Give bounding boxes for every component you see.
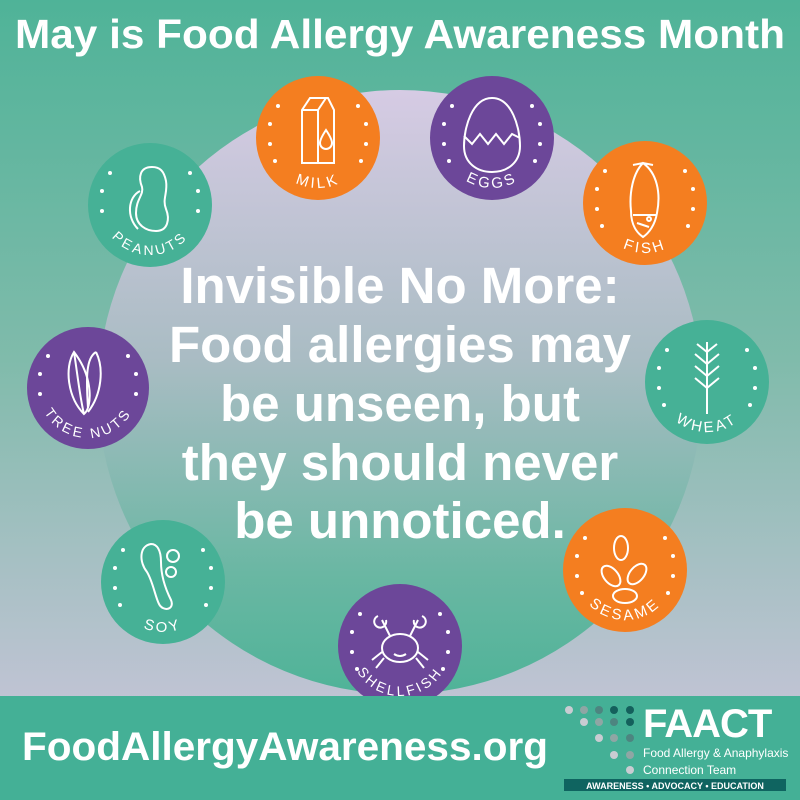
badge: sesame	[563, 508, 687, 632]
big background circle	[98, 90, 702, 694]
badge: wheat	[645, 320, 769, 444]
main message: be unnoticed.	[234, 492, 566, 549]
badge: shellfish	[338, 584, 462, 696]
badge: milk: MILK	[296, 174, 338, 188]
badge: wheat: WHEAT	[678, 412, 733, 432]
main message	[169, 257, 632, 549]
bottom band	[0, 696, 800, 800]
badge: fish: FISH	[624, 238, 664, 254]
badge: soy: SOY	[144, 619, 177, 632]
main message: be unseen, but	[220, 375, 580, 432]
badge: peanuts: PEANUTS	[112, 231, 185, 255]
badge: milk	[256, 76, 380, 200]
main message: Food allergies may	[169, 316, 632, 373]
badge: peanuts	[88, 143, 212, 267]
badge: shellfish: SHELLFISH	[358, 668, 441, 696]
FAACT logo: Connection Team	[643, 763, 736, 777]
title: May is Food Allergy Awareness Month	[15, 11, 785, 57]
badge: eggs: EGGS	[466, 172, 514, 188]
FAACT logo	[564, 702, 788, 791]
website url: FoodAllergyAwareness.org	[22, 725, 548, 769]
main message: they should never	[182, 434, 618, 491]
badge: tree nuts: TREE NUTS	[46, 407, 129, 438]
badge: eggs	[430, 76, 554, 200]
FAACT logo: Food Allergy & Anaphylaxis	[643, 746, 788, 760]
badge: sesame: SESAME	[590, 598, 658, 620]
badge: tree nuts	[27, 327, 149, 449]
badge: fish	[583, 141, 707, 265]
FAACT logo: FAACT	[643, 702, 772, 746]
main message: Invisible No More:	[180, 257, 620, 314]
FAACT logo: AWARENESS • ADVOCACY • EDUCATION	[586, 781, 764, 791]
badge: soy	[101, 520, 225, 644]
